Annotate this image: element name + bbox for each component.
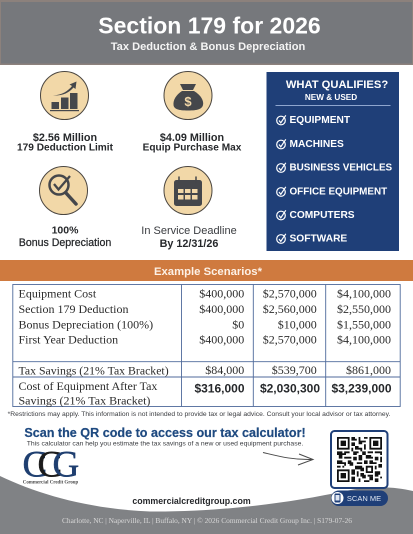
row labels: Cost of Equipment After Tax [18,379,157,393]
header banner [0,0,413,65]
checklist: EQUIPMENT [290,115,351,126]
panel: what qualifies [266,72,399,251]
column 2 values: $2,570,000 [263,286,317,300]
checklist: OFFICE EQUIPMENT [290,186,387,198]
row labels: Bonus Depreciation (100%) [18,317,153,331]
row labels: First Year Deduction [18,333,118,347]
logo: commercial credit group: C [22,444,47,486]
stat: bonus depreciation: 100% [52,224,79,236]
panel: what qualifies: NEW & USED [305,93,357,102]
stat: in service deadline [141,225,237,250]
section banner: example scenarios: Example Scenarios* [154,266,263,278]
scan me badge [331,490,388,506]
table: example scenarios [13,284,400,407]
row labels: Tax Savings (21% Tax Bracket) [18,363,169,377]
subtitle: Tax Deduction & Bonus Depreciation [111,41,306,53]
stat: bonus depreciation: Bonus Depreciation [19,237,111,249]
row labels: Savings (21% Tax Bracket) [18,393,150,407]
checklist: SOFTWARE [290,234,347,244]
icon: money bag: $ [184,94,192,109]
section banner: example scenarios [0,260,413,281]
bold totals: $2,030,300 [260,382,320,396]
icon: money bag [164,72,212,120]
column 1 values: $84,000 [205,363,244,377]
disclaimer: *Restrictions may apply. This information is not intended to provide tax or legal advice. Consult your local advisor or tax attorney. [8,411,390,418]
stat: purchase max: $4.09 Million [160,132,224,144]
column 1 values: $400,000 [199,332,244,346]
bold totals: $3,239,000 [331,382,392,396]
arrow to qr code [263,452,313,465]
icon: magnifier check [40,166,88,214]
stat: purchase max [143,132,242,154]
column 1 values: $400,000 [199,302,244,316]
checklist: BUSINESS VEHICLES [290,162,393,174]
logo: commercial credit group: G [52,444,79,486]
column 2 values [263,286,317,377]
stat: in service deadline: In Service Deadline [141,225,237,237]
icon: growth chart [40,72,88,120]
footer swoosh [0,476,413,534]
row labels: Equipment Cost [18,287,97,301]
website: commercialcreditgroup.com [132,496,251,506]
column 3 values: $4,100,000 [337,286,391,300]
column 3 values: $861,000 [346,363,391,377]
column 2 values: $2,560,000 [263,302,317,316]
column 3 values: $1,550,000 [337,317,391,331]
logo: commercial credit group [22,444,79,486]
icon: calendar [164,166,212,214]
stat: purchase max: Equip Purchase Max [143,142,242,154]
column 1 values: $400,000 [199,286,244,300]
bold totals [194,382,392,396]
row labels [18,287,169,407]
logo: commercial credit group: C [38,444,62,486]
stat: in service deadline: By 12/31/26 [160,238,218,250]
column 1 values [199,286,244,377]
checklist: COMPUTERS [290,210,355,221]
bold totals: $316,000 [194,382,245,396]
column 1 values: $0 [232,317,244,331]
column 3 values: $2,550,000 [337,302,391,316]
scan me badge: SCAN ME [347,494,381,503]
checklist [290,115,393,244]
stat: deduction limit [17,132,114,154]
row labels: Section 179 Deduction [18,302,128,316]
qr call to action heading: Scan the QR code to access our tax calculator! [24,426,306,440]
footer locations: Charlotte, NC | Naperville, IL | Buffalo, NY | © 2026 Commercial Credit Group Inc. | S179-07-26 [62,516,352,525]
stat: bonus depreciation [19,224,111,249]
panel heading: WHAT QUALIFIES? [286,79,388,91]
logo: commercial credit group: Commercial Credit Group [23,480,78,486]
stat: deduction limit: $2.56 Million [33,132,97,144]
column 2 values: $2,570,000 [263,332,317,346]
qr code [331,431,388,488]
column 3 values: $4,100,000 [337,332,391,346]
column 2 values: $10,000 [278,317,317,331]
check icons [277,115,286,243]
column 2 values: $539,700 [272,363,317,377]
title: Section 179 for 2026 [98,12,321,38]
qr call to action description: This calculator can help you estimate the tax savings of a new or used equipment purchase. [27,440,303,448]
stat: deduction limit: 179 Deduction Limit [17,142,114,154]
column 3 values [337,286,391,377]
checklist: MACHINES [290,139,344,150]
